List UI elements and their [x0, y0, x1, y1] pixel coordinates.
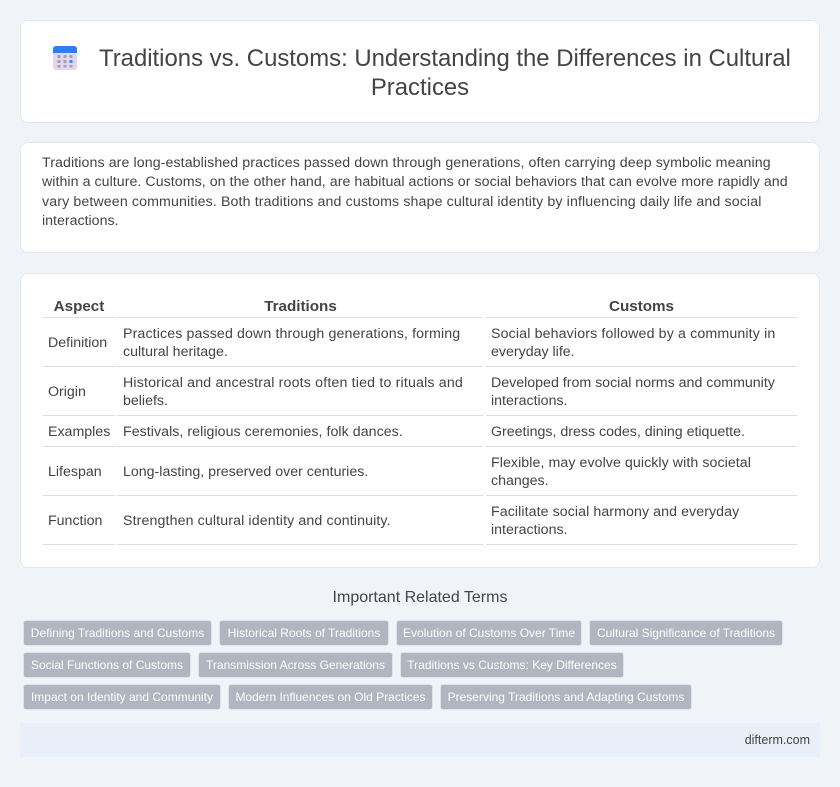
origin customs	[491, 375, 775, 409]
lifespan customs	[491, 455, 751, 489]
comparison table panel	[20, 273, 820, 568]
header: customs: Customs	[609, 298, 674, 315]
examples traditions: Festivals, religious ceremonies, folk dances.	[123, 424, 403, 440]
function customs: Facilitate social harmony and everyday	[491, 504, 739, 520]
function customs: interactions.	[491, 522, 568, 538]
lifespan traditions: Long-lasting, preserved over centuries.	[123, 464, 368, 480]
row: origin: Origin	[48, 384, 86, 400]
row: definition: Definition	[48, 335, 107, 351]
definition customs	[491, 326, 775, 360]
intro paragraph: interactions.	[42, 213, 118, 229]
tag	[440, 684, 692, 710]
definition customs: everyday life.	[491, 344, 575, 360]
row: function: Function	[48, 513, 102, 529]
function customs	[491, 504, 740, 538]
title: Practices	[371, 74, 469, 101]
tag	[198, 652, 393, 678]
tag: Traditions vs Customs: Key Differences	[407, 658, 617, 672]
tag	[23, 684, 221, 710]
intro paragraph: Traditions are long-established practices passed down through generations, often carrying deep symbolic meaning	[42, 155, 771, 171]
intro text panel	[20, 142, 820, 253]
tag: Defining Traditions and Customs	[31, 626, 204, 640]
tag	[400, 652, 624, 678]
lifespan customs: changes.	[491, 473, 549, 489]
table	[43, 298, 797, 545]
origin traditions: Historical and ancestral roots often tied to rituals and	[123, 375, 463, 391]
definition traditions: Practices passed down through generations, forming	[123, 326, 460, 342]
origin customs: interactions.	[491, 393, 568, 409]
title: Traditions vs. Customs: Understanding the Differences in Cultural	[99, 45, 791, 72]
tag	[228, 684, 433, 710]
definition customs: Social behaviors followed by a community in	[491, 326, 775, 342]
intro paragraph: vary between communities. Both traditions and customs shape cultural identity by influencing daily life and social	[42, 194, 762, 210]
origin traditions	[123, 375, 463, 409]
tag: Social Functions of Customs	[31, 658, 183, 672]
header panel	[20, 20, 820, 123]
tag: Preserving Traditions and Adapting Customs	[448, 690, 684, 704]
header: aspect: Aspect	[54, 298, 104, 315]
definition traditions	[123, 326, 460, 360]
lifespan customs: Flexible, may evolve quickly with societal	[491, 455, 751, 471]
function traditions: Strengthen cultural identity and continuity.	[123, 513, 391, 529]
tag	[23, 652, 191, 678]
tag: Impact on Identity and Community	[31, 690, 213, 704]
tag: Transmission Across Generations	[206, 658, 385, 672]
tag: Modern Influences on Old Practices	[235, 690, 426, 704]
related terms heading: Important Related Terms	[333, 589, 507, 606]
tag	[219, 620, 389, 646]
origin customs: Developed from social norms and community	[491, 375, 775, 391]
tag	[396, 620, 582, 646]
icon: calendar	[53, 46, 77, 70]
header: traditions: Traditions	[264, 298, 337, 315]
tag: Evolution of Customs Over Time	[403, 626, 575, 640]
tag: Historical Roots of Traditions	[228, 626, 380, 640]
origin traditions: beliefs.	[123, 393, 168, 409]
tag	[589, 620, 783, 646]
intro paragraph: within a culture. Customs, on the other hand, are habitual actions or social behaviors that can evolve more rapidly and	[42, 174, 788, 190]
footer site name: difterm.com	[745, 733, 810, 747]
row: lifespan: Lifespan	[48, 464, 102, 480]
row: examples: Examples	[48, 424, 110, 440]
footer bar	[20, 723, 820, 757]
tag	[23, 620, 212, 646]
title	[99, 45, 791, 101]
definition traditions: cultural heritage.	[123, 344, 228, 360]
intro paragraph	[42, 155, 788, 229]
examples customs: Greetings, dress codes, dining etiquette.	[491, 424, 745, 440]
related terms tags	[23, 620, 783, 710]
tag: Cultural Significance of Traditions	[597, 626, 775, 640]
